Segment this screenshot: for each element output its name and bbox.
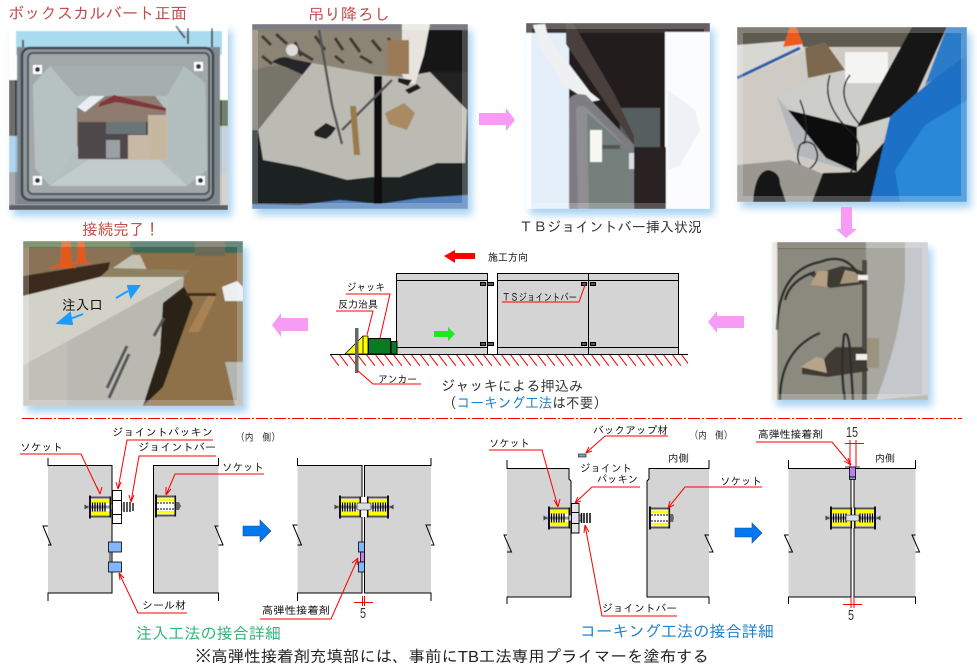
dimension 5: 5 bbox=[360, 605, 366, 622]
label: inside: （内 側） bbox=[236, 432, 280, 444]
label: elastic adhesive: 高弾性接着剤 bbox=[262, 605, 330, 617]
caption: jack pushing: ジャッキによる押込み bbox=[441, 379, 583, 395]
label: joint packing bbox=[112, 427, 213, 489]
label: joint bar: ジョイントバー bbox=[602, 603, 677, 615]
detail: injection method, before joining bbox=[20, 427, 280, 613]
adhesive filling bbox=[845, 467, 860, 480]
label: socket right bbox=[668, 476, 762, 508]
label: socket right: ソケット bbox=[720, 476, 762, 488]
label: TS joint bar: ＴＳジョイントバー bbox=[502, 292, 577, 304]
blocks bbox=[293, 458, 434, 601]
label: joint packing: パッキン bbox=[597, 474, 638, 486]
seal material bbox=[108, 542, 122, 572]
dimension 5: 5 bbox=[848, 607, 854, 624]
heading: connection complete: 接続完了！ bbox=[82, 221, 160, 239]
reaction jig and jack bbox=[345, 328, 397, 373]
heading: box culvert front: ボックスカルバート正面 bbox=[8, 5, 187, 23]
left block bbox=[43, 458, 112, 601]
label: socket left bbox=[20, 442, 102, 494]
arrow: caulking before to after bbox=[735, 523, 762, 543]
detail: injection method, after joining bbox=[136, 458, 434, 643]
label: jack bbox=[346, 282, 390, 338]
label: joint bar: ジョイントバー bbox=[138, 442, 216, 454]
label: socket left: ソケット bbox=[20, 442, 63, 454]
photo: connection complete bbox=[23, 241, 247, 412]
right block bbox=[647, 460, 713, 604]
label: socket bbox=[489, 438, 560, 507]
label: joint bar bbox=[584, 525, 677, 616]
heading: lowering: 吊り降ろし bbox=[308, 5, 390, 24]
label: inside: 内側 bbox=[875, 453, 895, 465]
detail: caulking method, after joining bbox=[580, 424, 920, 641]
left block bbox=[504, 460, 571, 604]
backup material bbox=[578, 454, 586, 457]
dimension 15: 15 bbox=[846, 424, 858, 441]
label: socket right bbox=[166, 462, 264, 495]
ground hatch bbox=[330, 354, 688, 366]
label: elastic adhesive bbox=[756, 429, 851, 465]
dimension 15 bbox=[845, 424, 864, 467]
label: reaction jig bbox=[336, 299, 378, 335]
caption: caulking method: コーキング工法の接合詳細 bbox=[580, 623, 774, 641]
label: backup material bbox=[586, 425, 669, 453]
photo: jacks on culvert bbox=[772, 242, 932, 406]
detail: caulking method, before joining bbox=[489, 425, 762, 616]
right socket bbox=[155, 494, 181, 518]
footnote: ※高弾性接着剤充填部には、事前にTB工法専用プライマーを塗布する bbox=[195, 648, 709, 666]
label: joint packing: ジョイントパッキン bbox=[112, 427, 213, 439]
construction direction bbox=[444, 250, 528, 264]
photo: jack setup with cables bbox=[737, 27, 971, 208]
arrow: step 5 to step 6 bbox=[708, 311, 744, 333]
label: jack: ジャッキ bbox=[347, 282, 385, 294]
blocks bbox=[784, 460, 920, 604]
dimension 5 bbox=[354, 596, 373, 622]
arrow: step 6 from step 5 bbox=[272, 313, 308, 337]
photo: box culvert front bbox=[9, 25, 232, 216]
label: seal material: シール材 bbox=[142, 600, 187, 612]
dimension 5 bbox=[843, 597, 862, 624]
construction direction: 施工方向 bbox=[488, 251, 528, 264]
joint packing bbox=[112, 490, 122, 524]
label: reaction jig: 反力治具 bbox=[338, 299, 378, 311]
label: joint bar bbox=[129, 442, 216, 502]
photo: lowering the culvert bbox=[252, 24, 472, 215]
arrow: injection before to after bbox=[243, 520, 271, 542]
coupled sockets bbox=[334, 496, 394, 518]
bevel overlays on photos bbox=[12, 26, 964, 403]
left socket and bar bbox=[544, 506, 590, 530]
joint bars bbox=[480, 282, 596, 346]
label: backup material: バックアップ材 bbox=[593, 425, 669, 437]
jack pushing diagram bbox=[330, 250, 688, 412]
arrow: step 1 to step 2 bbox=[479, 108, 515, 131]
coupled sockets bbox=[826, 506, 880, 530]
label: TS joint bar bbox=[502, 285, 585, 304]
photo label: injection port: 注入口 bbox=[62, 297, 103, 313]
caption: injection method: 注入工法の接合詳細 bbox=[136, 625, 281, 643]
label: elastic adhesive: 高弾性接着剤 bbox=[758, 429, 823, 441]
label: socket right: ソケット bbox=[222, 462, 264, 474]
caption: jack pushing: （コーキング工法は不要） bbox=[443, 396, 607, 412]
photo label: injection port bbox=[58, 286, 139, 324]
caption: jack pushing bbox=[441, 379, 607, 412]
label: inside (heading): （内 側） bbox=[690, 430, 732, 442]
label: inside (inner): 内側 bbox=[668, 453, 689, 465]
right block bbox=[154, 458, 223, 601]
arrow: step 4 to step 5 bbox=[836, 207, 857, 238]
left socket and joint bar bbox=[84, 496, 133, 518]
joint packing bbox=[572, 504, 579, 533]
culvert units bbox=[396, 274, 678, 354]
label: joint packing: ジョイント bbox=[580, 463, 632, 475]
right socket bbox=[649, 506, 674, 530]
label: anchor: アンカー bbox=[378, 374, 417, 386]
label: anchor bbox=[357, 370, 421, 386]
push arrow bbox=[434, 327, 455, 341]
label: joint packing bbox=[575, 463, 640, 503]
label: socket: ソケット bbox=[489, 438, 530, 450]
label: elastic adhesive bbox=[260, 558, 358, 619]
caption: TB joint bar insertion: ＴＢジョイントバー挿入状況 bbox=[519, 219, 702, 235]
label: seal material bbox=[119, 573, 187, 613]
photo: TB joint bar insertion bbox=[526, 23, 714, 215]
seal and adhesive bbox=[358, 542, 364, 572]
